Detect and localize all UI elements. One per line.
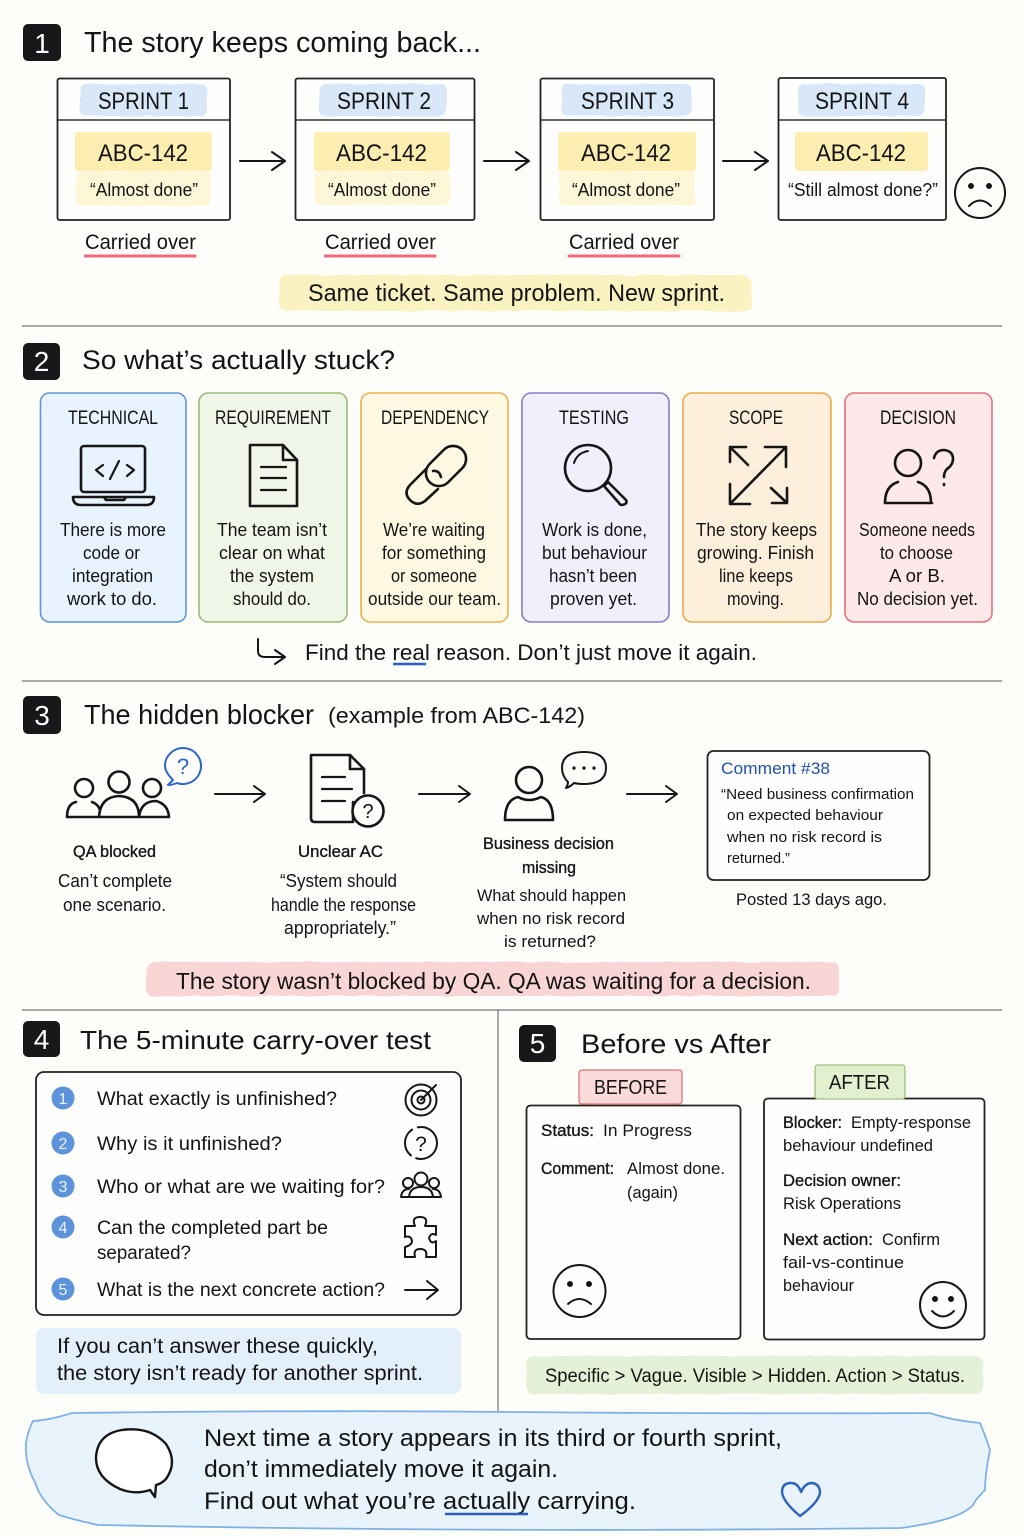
carried over label 3: Carried over [569, 231, 679, 254]
icon: laptop [73, 446, 154, 505]
question 1: What exactly is unfinished? [97, 1089, 337, 1110]
question 2: Why is it unfinished? [97, 1134, 282, 1155]
step: business decision missing: Business decision [483, 834, 614, 853]
panel: decision: Someone needs [859, 520, 975, 540]
panel: testing: hasn’t been [549, 566, 637, 586]
callout: QA was waiting: The story wasn’t blocked by QA. QA was waiting for a decision. [176, 968, 811, 994]
heading 2: So what’s actually stuck? [82, 345, 395, 375]
icon: curved arrow [258, 639, 285, 664]
arrow [419, 786, 470, 802]
icon: document [250, 445, 297, 506]
panel: requirement: clear on what [219, 543, 325, 563]
sprint 1 card: “Almost done” [90, 180, 198, 200]
panel: dependency: outside our team. [368, 589, 501, 609]
tag: after [815, 1065, 905, 1099]
sprint 2 card [296, 78, 474, 220]
arrow [484, 152, 529, 170]
question 2: 2 [59, 1136, 68, 1153]
heading 1: The story keeps coming back... [84, 27, 481, 59]
callout: same ticket: Same ticket. Same problem. New sprint. [308, 280, 725, 307]
icon: sad face [955, 168, 1005, 218]
panel: before: (again) [627, 1183, 678, 1202]
badge 3 [23, 696, 61, 734]
panel: technical: code or [83, 543, 140, 563]
panel: technical: TECHNICAL [68, 408, 158, 429]
icon: person with question mark [885, 450, 953, 503]
icon: person with speech bubble [505, 752, 606, 820]
section 2: what's actually stuck [23, 343, 992, 665]
panel: decision: DECISION [880, 408, 956, 429]
comment card: “Need business confirmation [721, 786, 914, 803]
panel: requirement: The team isn’t [217, 520, 327, 540]
heading 4: The 5-minute carry-over test [80, 1025, 432, 1055]
arrow [240, 152, 285, 170]
takeaway text: Find the real reason. Don’t just move it again. [305, 640, 757, 665]
comment age: Posted 13 days ago. [736, 890, 887, 909]
icon: expanding arrows [730, 447, 787, 504]
question 5: What is the next concrete action? [97, 1280, 385, 1301]
panel: after [764, 1065, 984, 1340]
question 4: Can the completed part be [97, 1218, 328, 1239]
heading 3 [84, 699, 585, 730]
step: business decision missing: when no risk record [476, 909, 625, 928]
question 3: Who or what are we waiting for? [97, 1177, 385, 1198]
panel: before: Status: [541, 1121, 594, 1140]
panel: requirement: REQUIREMENT [215, 408, 331, 429]
step: business decision missing: missing [522, 858, 576, 877]
carried over label 1: Carried over [85, 231, 196, 254]
closing banner [26, 1411, 990, 1530]
badge 1 [23, 24, 61, 61]
sprint 4 card: SPRINT 4 [815, 88, 909, 115]
panel: scope [683, 393, 831, 622]
step: unclear AC: handle the response [271, 895, 416, 915]
arrow [215, 786, 265, 802]
badge 3: 3 [34, 700, 50, 731]
question 3: 3 [59, 1179, 68, 1196]
panel: after: Empty-response [851, 1113, 971, 1132]
panel: after: behaviour undefined [783, 1136, 933, 1155]
sprint 1 card: SPRINT 1 [98, 88, 189, 115]
panel: technical: There is more [60, 520, 166, 540]
panel: dependency: We’re waiting [383, 520, 485, 540]
panel: decision: A or B. [889, 566, 945, 586]
section 4: carry-over test [23, 1021, 461, 1394]
panel: after: Risk Operations [783, 1194, 901, 1213]
comment card [708, 751, 930, 880]
icon: arrow [405, 1281, 438, 1299]
panel: requirement [199, 393, 347, 622]
icon: heart [782, 1483, 820, 1516]
closing text: Next time a story appears in its third or fourth sprint, [204, 1425, 782, 1452]
panel: technical [40, 393, 186, 622]
panel: dependency [361, 393, 508, 622]
step: business decision missing: What should happen [477, 886, 626, 905]
panel: testing: Work is done, [542, 520, 647, 540]
step: QA blocked: ? [177, 754, 189, 779]
icon: sad face [554, 1265, 606, 1317]
panel: scope: The story keeps [696, 520, 817, 540]
icon: target [406, 1084, 436, 1116]
icon: magnifying glass [565, 445, 626, 505]
comment card: on expected behaviour [727, 807, 883, 824]
step: QA blocked [58, 748, 201, 915]
icon: puzzle piece [405, 1217, 436, 1257]
panel: decision: No decision yet. [857, 589, 978, 609]
badge 4: 4 [34, 1024, 49, 1055]
icon: chain link [406, 441, 471, 504]
badge 2: 2 [34, 346, 49, 377]
sprint 3 card: “Almost done” [572, 180, 680, 200]
panel: requirement: the system [230, 566, 314, 586]
panel: after: Blocker: [783, 1113, 842, 1132]
panel: dependency: or someone [391, 566, 477, 586]
sprint 1 card: ABC-142 [98, 140, 188, 167]
arrow [723, 152, 768, 170]
tag: before: BEFORE [594, 1077, 667, 1099]
panel: after: Confirm [882, 1230, 940, 1249]
panel: scope: line keeps [719, 566, 793, 586]
closing text [204, 1425, 782, 1515]
sprint 3 card: SPRINT 3 [581, 88, 674, 115]
closing text: Find out what you’re actually carrying. [204, 1488, 636, 1515]
panel: testing [522, 393, 669, 622]
carried over label 2: Carried over [325, 231, 436, 254]
callout: not ready [36, 1328, 461, 1394]
panel: after: behaviour [783, 1276, 854, 1295]
icon: team with question [67, 748, 201, 817]
sprint 2 card: ABC-142 [336, 140, 427, 167]
tag: after: AFTER [829, 1072, 890, 1094]
heading 5: Before vs After [581, 1029, 771, 1059]
callout: not ready: the story isn’t ready for another sprint. [57, 1362, 423, 1385]
badge 1: 1 [34, 28, 50, 59]
panel: decision: to choose [880, 543, 953, 563]
sprint 2 card: SPRINT 2 [337, 88, 431, 115]
panel: after: Decision owner: [783, 1171, 901, 1190]
tag: before [579, 1070, 682, 1104]
panel: before: Comment: [541, 1159, 614, 1178]
question 1: 1 [59, 1091, 68, 1108]
icon: group [401, 1172, 441, 1197]
sprint 3 card [540, 78, 714, 220]
step: QA blocked: Can’t complete [58, 871, 172, 891]
icon: smiling face [920, 1282, 966, 1328]
step: unclear AC: appropriately.” [284, 918, 396, 938]
icon: question circle: ? [415, 1133, 427, 1156]
icon: speech bubble [96, 1429, 172, 1497]
sprint 3 card: ABC-142 [581, 140, 671, 167]
sprint 2 card: “Almost done” [328, 180, 436, 200]
heading 3: (example from ABC-142) [328, 703, 585, 728]
panel: scope: SCOPE [729, 408, 783, 429]
badge 2 [23, 343, 60, 380]
panel: questions [36, 1072, 461, 1315]
section 3: the hidden blocker [23, 696, 930, 996]
sprint 4 card: “Still almost done?” [788, 180, 938, 200]
section 5: before vs after [519, 1025, 984, 1394]
panel: dependency: DEPENDENCY [381, 408, 489, 429]
panel: after: Next action: [783, 1230, 873, 1249]
badge 5: 5 [530, 1028, 545, 1059]
panel: decision [845, 393, 992, 622]
badge 5 [519, 1025, 556, 1062]
step: business decision missing [476, 752, 626, 951]
comment card: returned.” [727, 850, 790, 867]
panel: testing: proven yet. [550, 589, 637, 609]
closing text: don’t immediately move it again. [204, 1456, 558, 1483]
comment card: when no risk record is [726, 829, 882, 846]
panel: technical: work to do. [66, 589, 157, 609]
icon: document with question [311, 755, 384, 826]
question 5: 5 [59, 1282, 68, 1299]
callout: not ready: If you can’t answer these quickly, [57, 1335, 378, 1358]
panel: dependency: for something [382, 543, 486, 563]
question 4: 4 [59, 1220, 68, 1237]
step: unclear AC: Unclear AC [298, 842, 383, 861]
question 2 [52, 1132, 282, 1155]
step: business decision missing: is returned? [504, 932, 596, 951]
step: unclear AC: “System should [280, 871, 397, 891]
panel: scope: moving. [727, 589, 784, 609]
question 4: separated? [97, 1243, 191, 1264]
panel: after: fail-vs-continue [783, 1253, 904, 1272]
callout: specific over vague: Specific > Vague. Visible > Hidden. Action > Status. [545, 1366, 965, 1387]
panel: before: Almost done. [627, 1159, 725, 1178]
step: unclear AC: ? [362, 801, 374, 823]
panel: before [526, 1070, 740, 1339]
icon: question circle [405, 1127, 437, 1159]
panel: requirement: should do. [233, 589, 311, 609]
sprint 1 card [58, 78, 230, 220]
sprint 4 card [778, 78, 946, 220]
step: QA blocked: one scenario. [63, 895, 166, 915]
panel: scope: growing. Finish [697, 543, 814, 563]
sprint 4 card: ABC-142 [816, 140, 906, 167]
arrow [627, 786, 677, 802]
heading 3: The hidden blocker [84, 699, 314, 730]
step: unclear AC [271, 755, 416, 938]
panel: testing: TESTING [559, 408, 629, 429]
panel: testing: but behaviour [542, 543, 647, 563]
badge 4 [23, 1021, 60, 1057]
callout: same ticket [279, 275, 751, 311]
step: QA blocked: QA blocked [73, 842, 156, 861]
question 4 [52, 1216, 328, 1264]
comment card: Comment #38 [721, 759, 830, 778]
section 1: the story keeps coming back [23, 24, 1005, 311]
panel: technical: integration [72, 566, 153, 586]
panel: before: In Progress [603, 1121, 692, 1140]
callout: specific over vague [526, 1356, 983, 1394]
